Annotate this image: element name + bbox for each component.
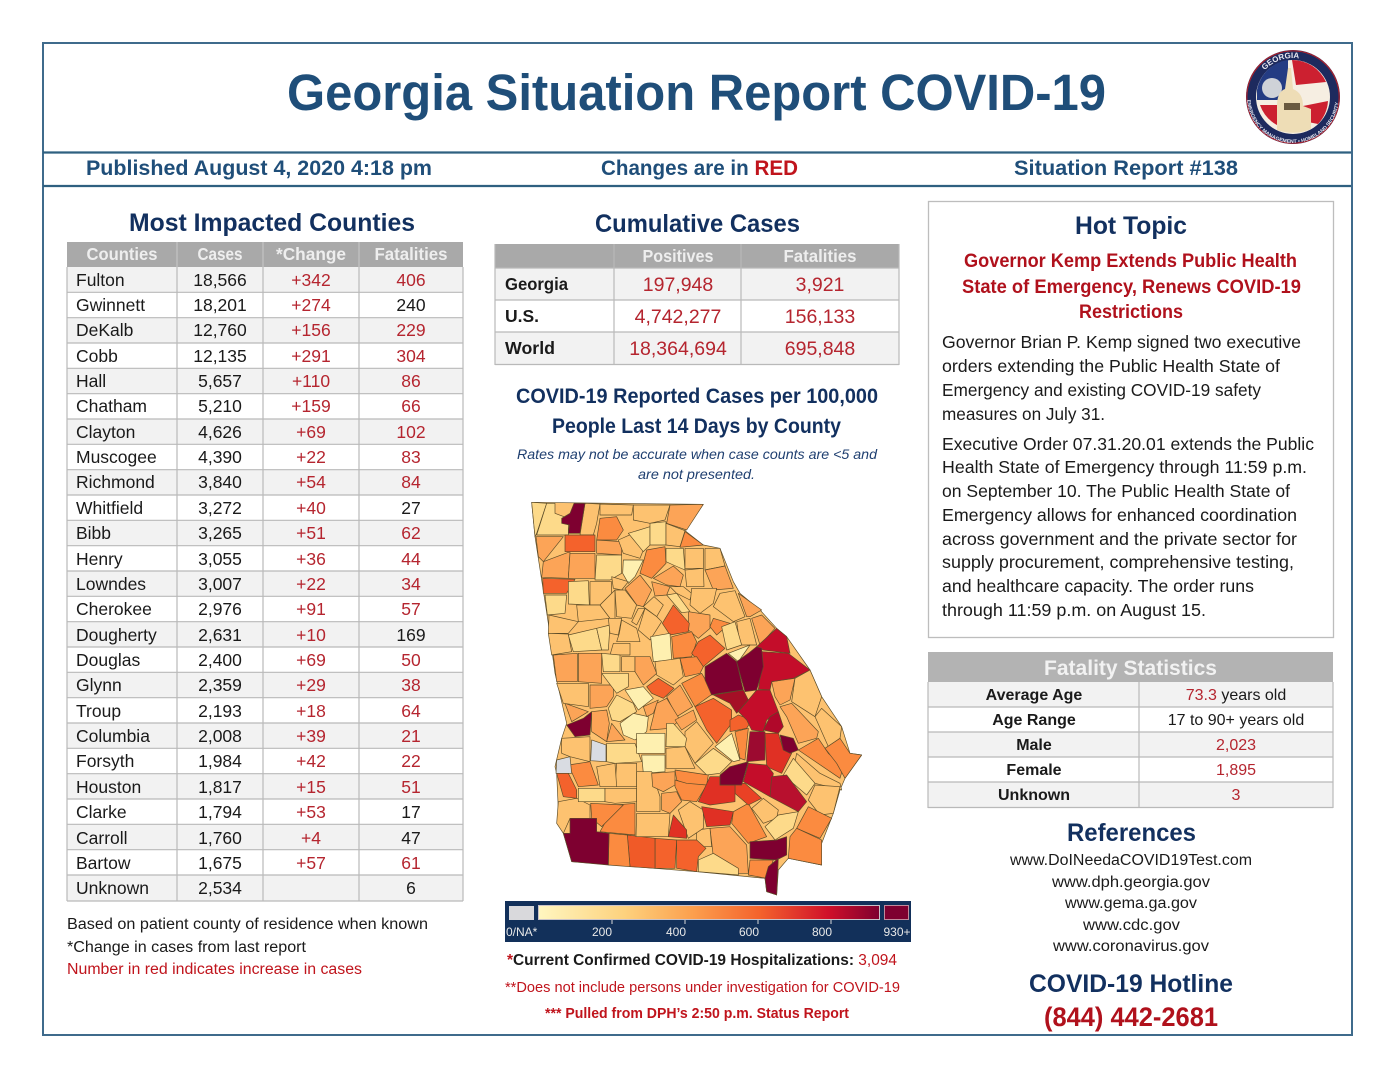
row: Richmond: 84 (401, 472, 421, 492)
row: Columbia: 2,008 (198, 726, 242, 746)
row: Houston: 51 (401, 777, 421, 797)
row: Henry: 44 (401, 549, 421, 569)
row: Gwinnett: Gwinnett (76, 295, 145, 315)
row: female: 1,895 (1216, 762, 1256, 779)
map legend colour bar: 800 (812, 925, 832, 939)
row: Dougherty: 169 (396, 625, 426, 645)
logo: Georgia Emergency Management seal: EMERGENCY MANAGEMENT • HOMELAND SECURITY (1247, 100, 1338, 143)
row: Muscogee: 4,390 (198, 447, 242, 467)
row: Clarke: 17 (401, 802, 421, 822)
row: Muscogee (76, 447, 421, 467)
row: Cobb: 12,135 (193, 346, 247, 366)
row: Gwinnett (76, 295, 426, 315)
row: Clarke: 1,794 (198, 802, 242, 822)
row: Gwinnett: +274 (291, 295, 331, 315)
row: age range: Age Range (992, 712, 1076, 729)
table footnotes (67, 916, 428, 978)
row: Douglas: 2,400 (198, 650, 242, 670)
row: Whitfield: +40 (296, 498, 326, 518)
row: Cherokee: Cherokee (76, 599, 152, 619)
row: Dougherty: 2,631 (198, 625, 242, 645)
row: Chatham: Chatham (76, 396, 147, 416)
row: unknown (998, 787, 1241, 804)
panel: cumulative cases table: 197,948 (643, 274, 713, 296)
map legend colour bar: 930+ (883, 925, 911, 939)
row: Clayton (76, 422, 426, 442)
hospitalizations line: *Current Confirmed COVID-19 Hospitalizations: 3,094 (507, 952, 897, 969)
logo: Georgia Emergency Management seal (1246, 50, 1340, 144)
row: Henry (76, 549, 421, 569)
hot topic headline: Restrictions (1079, 302, 1183, 323)
map note (517, 446, 878, 482)
panel: cumulative cases table: Positives (642, 246, 714, 266)
row: average age (986, 687, 1286, 704)
map legend colour bar (505, 901, 911, 942)
hot topic paragraph 1: orders extending the Public Health State of (942, 356, 1280, 376)
heading: most impacted counties: Most Impacted Counties (129, 209, 415, 237)
row: Bartow: 1,675 (198, 853, 242, 873)
row: Hall: 5,657 (198, 371, 242, 391)
row: Clayton: Clayton (76, 422, 135, 442)
row: Cherokee: 2,976 (198, 599, 242, 619)
row: average age: 73.3 years old (1186, 687, 1286, 704)
row: Clarke: Clarke (76, 802, 127, 822)
panel: hot topic (928, 202, 1334, 638)
row: Carroll: 47 (401, 828, 421, 848)
map note: are not presented. (638, 466, 755, 482)
panel: counties table: Cases (198, 244, 243, 264)
row: Douglas (76, 650, 421, 670)
row: Troup: Troup (76, 701, 121, 721)
hotline number: (844) 442-2681 (1044, 1002, 1218, 1032)
table footnotes: Based on patient county of residence when known (67, 916, 428, 933)
reference links: www.dph.georgia.gov (1051, 874, 1210, 891)
row: Houston (76, 777, 421, 797)
situation report number: Situation Report #138 (1014, 156, 1238, 180)
hot topic paragraph 2: Emergency allows for enhanced coordination (942, 505, 1297, 525)
published date: Published August 4, 2020 4:18 pm (86, 156, 432, 180)
row: Bibb: 3,265 (198, 523, 242, 543)
heading: map title (516, 384, 878, 438)
row: Unknown: 6 (406, 878, 416, 898)
heading: map title: People Last 14 Days by County (552, 414, 841, 438)
panel: cumulative cases table: Georgia (505, 274, 568, 294)
row: Muscogee: +22 (296, 447, 326, 467)
panel: cumulative cases table: 695,848 (785, 338, 855, 360)
row: Houston: +15 (296, 777, 326, 797)
row: Carroll (76, 828, 421, 848)
map legend colour bar: 600 (739, 925, 759, 939)
row: Forsyth: Forsyth (76, 751, 134, 771)
reference links: www.coronavirus.gov (1052, 938, 1209, 955)
row: Clayton: 102 (396, 422, 426, 442)
hot topic paragraph 1: Emergency and existing COVID-19 safety (942, 380, 1261, 400)
row: Muscogee: 83 (401, 447, 421, 467)
heading: map title: COVID-19 Reported Cases per 100,000 (516, 384, 878, 408)
row: Dougherty: +10 (296, 625, 326, 645)
row: Whitfield: 3,272 (198, 498, 242, 518)
reference links (1009, 852, 1252, 955)
row: Troup: 2,193 (198, 701, 242, 721)
hot topic paragraph 1: Governor Brian P. Kemp signed two executive (942, 332, 1301, 352)
row: Cherokee: 57 (401, 599, 421, 619)
panel: cumulative cases table: 156,133 (785, 306, 855, 328)
heading: cumulative cases: Cumulative Cases (595, 210, 800, 238)
reference links: www.cdc.gov (1082, 917, 1180, 934)
row: Fulton (76, 270, 426, 290)
DPH status report note: *** Pulled from DPH’s 2:50 p.m. Status Report (545, 1006, 849, 1022)
persons under investigation note: **Does not include persons under investigation for COVID-19 (505, 980, 900, 996)
row: Columbia (76, 726, 421, 746)
row: Cherokee: +91 (296, 599, 326, 619)
row: Dougherty: Dougherty (76, 625, 157, 645)
row: Douglas: +69 (296, 650, 326, 670)
row: average age: Average Age (986, 687, 1082, 704)
row: male: Male (1016, 737, 1052, 754)
row: unknown: 3 (1232, 787, 1241, 804)
row: Clarke: +53 (296, 802, 326, 822)
row: Richmond (76, 472, 421, 492)
header divider lines (43, 152, 1351, 186)
row: Columbia: +39 (296, 726, 326, 746)
panel: cumulative cases table: 3,921 (796, 274, 844, 296)
hot topic heading: Hot Topic (1075, 212, 1187, 240)
row: Cobb (76, 346, 426, 366)
row: Houston: 1,817 (198, 777, 242, 797)
row: Bartow (76, 853, 421, 873)
row: Unknown: Unknown (76, 878, 149, 898)
row: Bibb: Bibb (76, 523, 111, 543)
logo: Georgia Emergency Management seal: GEORGIA (1262, 52, 1299, 69)
panel: cumulative cases table: World (505, 338, 555, 358)
hot topic paragraph 2 (942, 434, 1314, 620)
row: Whitfield: Whitfield (76, 498, 143, 518)
panel: counties table: *Change (276, 244, 346, 264)
row: Muscogee: Muscogee (76, 447, 157, 467)
panel: counties table: Counties (86, 244, 158, 264)
row: Richmond: 3,840 (198, 472, 242, 492)
row: Clarke (76, 802, 421, 822)
hot topic paragraph 2: Executive Order 07.31.20.01 extends the Public (942, 434, 1314, 454)
hot topic paragraph 1 (942, 332, 1301, 424)
row: Cherokee (76, 599, 421, 619)
map legend colour bar: 400 (666, 925, 686, 939)
row: Glynn: 38 (401, 675, 421, 695)
row: Carroll: Carroll (76, 828, 128, 848)
row: Glynn: Glynn (76, 675, 122, 695)
row: DeKalb: DeKalb (76, 320, 133, 340)
row: Henry: +36 (296, 549, 326, 569)
row: DeKalb (76, 320, 426, 340)
reference links: www.gema.ga.gov (1064, 895, 1197, 912)
row: Henry: 3,055 (198, 549, 242, 569)
row: Cobb: +291 (291, 346, 331, 366)
panel: cumulative cases table (495, 244, 899, 365)
hot topic headline: Governor Kemp Extends Public Health (964, 251, 1297, 272)
heading: references: References (1067, 819, 1196, 847)
row: Forsyth: 22 (401, 751, 421, 771)
row: Richmond: Richmond (76, 472, 155, 492)
hot topic paragraph 2: Health State of Emergency through 11:59 p.m. (942, 457, 1307, 477)
hot topic paragraph 2: through 11:59 p.m. on August 15. (942, 600, 1206, 620)
row: DeKalb: +156 (291, 320, 331, 340)
row: Clayton: 4,626 (198, 422, 242, 442)
row: male: 2,023 (1216, 737, 1256, 754)
row: Fulton: 406 (396, 270, 426, 290)
row: male (1016, 737, 1256, 754)
panel: cumulative cases table: 4,742,277 (635, 306, 721, 328)
panel: cumulative cases table: 18,364,694 (629, 338, 727, 360)
row: female (1006, 762, 1256, 779)
row: Glynn: 2,359 (198, 675, 242, 695)
row: Henry: Henry (76, 549, 123, 569)
changes note: Changes are in RED (601, 156, 798, 180)
table footnotes: Number in red indicates increase in cases (67, 961, 362, 978)
reference links: www.DoINeedaCOVID19Test.com (1009, 852, 1252, 869)
row: Bartow: Bartow (76, 853, 131, 873)
row: Chatham (76, 396, 421, 416)
title: Georgia Situation Report COVID-19 (287, 64, 1106, 121)
row: Columbia: Columbia (76, 726, 150, 746)
row: Gwinnett: 18,201 (193, 295, 247, 315)
hot topic paragraph 2: across government and the private sector for (942, 529, 1297, 549)
row: Unknown (76, 878, 416, 898)
row: Whitfield: 27 (401, 498, 421, 518)
row: Bartow: 61 (401, 853, 421, 873)
panel: cumulative cases table: U.S. (505, 306, 539, 326)
row: Glynn (76, 675, 421, 695)
hot topic paragraph 2: supply procurement, comprehensive testing, (942, 552, 1294, 572)
row: Troup: 64 (401, 701, 421, 721)
hot topic headline: State of Emergency, Renews COVID-19 (962, 277, 1301, 298)
row: Cobb: Cobb (76, 346, 118, 366)
row: Bibb: +51 (296, 523, 326, 543)
row: Hall: Hall (76, 371, 106, 391)
row: Bibb: 62 (401, 523, 421, 543)
row: Douglas: 50 (401, 650, 421, 670)
row: female: Female (1006, 762, 1062, 779)
panel: fatality statistics: Fatality Statistics (1044, 657, 1217, 680)
hot topic headline (962, 251, 1301, 323)
row: Unknown: 2,534 (198, 878, 242, 898)
choropleth map: Georgia counties (532, 502, 862, 895)
map note: Rates may not be accurate when case counts are <5 and (517, 446, 878, 462)
panel: fatality statistics (928, 652, 1333, 808)
row: Lowndes: Lowndes (76, 574, 146, 594)
row: Lowndes: 34 (401, 574, 421, 594)
row: Forsyth: 1,984 (198, 751, 242, 771)
row: Chatham: +159 (291, 396, 331, 416)
row: Richmond: +54 (296, 472, 326, 492)
map legend colour bar: 0/NA* (506, 925, 538, 939)
panel: counties table (67, 242, 463, 901)
row: DeKalb: 229 (396, 320, 426, 340)
row: DeKalb: 12,760 (193, 320, 247, 340)
table footnotes: *Change in cases from last report (67, 939, 307, 956)
row: Columbia: 21 (401, 726, 421, 746)
row: Dougherty (76, 625, 426, 645)
row: unknown: Unknown (998, 787, 1070, 804)
row: Gwinnett: 240 (396, 295, 426, 315)
row: Chatham: 66 (401, 396, 421, 416)
map legend colour bar: 200 (592, 925, 612, 939)
row: Chatham: 5,210 (198, 396, 242, 416)
hot topic paragraph 2: and healthcare capacity. The order runs (942, 576, 1254, 596)
row: Lowndes: 3,007 (198, 574, 242, 594)
row: Troup: +18 (296, 701, 326, 721)
row: age range (992, 712, 1304, 729)
hot topic paragraph 2: on September 10. The Public Health State of (942, 481, 1290, 501)
row: Houston: Houston (76, 777, 141, 797)
row: Hall: +110 (292, 371, 330, 391)
panel: counties table: Fatalities (374, 244, 448, 264)
row: Troup (76, 701, 421, 721)
row: Hall: 86 (401, 371, 421, 391)
row: Bibb (76, 523, 421, 543)
row: Forsyth (76, 751, 421, 771)
row: Fulton: +342 (291, 270, 331, 290)
row: Forsyth: +42 (296, 751, 326, 771)
hot topic paragraph 1: measures on July 31. (942, 404, 1105, 424)
row: Douglas: Douglas (76, 650, 140, 670)
row: Clayton: +69 (296, 422, 326, 442)
row: Bartow: +57 (296, 853, 326, 873)
row: Whitfield (76, 498, 421, 518)
COVID-19 hotline label: COVID-19 Hotline (1029, 970, 1233, 998)
row: Fulton: 18,566 (193, 270, 247, 290)
row: Lowndes: +22 (296, 574, 326, 594)
row: Cobb: 304 (396, 346, 426, 366)
row: Hall (76, 371, 421, 391)
row: Carroll: 1,760 (198, 828, 242, 848)
row: Fulton: Fulton (76, 270, 125, 290)
row: Carroll: +4 (301, 828, 321, 848)
panel: cumulative cases table: Fatalities (784, 246, 857, 266)
row: Lowndes (76, 574, 421, 594)
row: age range: 17 to 90+ years old (1168, 712, 1304, 729)
row: Glynn: +29 (296, 675, 326, 695)
